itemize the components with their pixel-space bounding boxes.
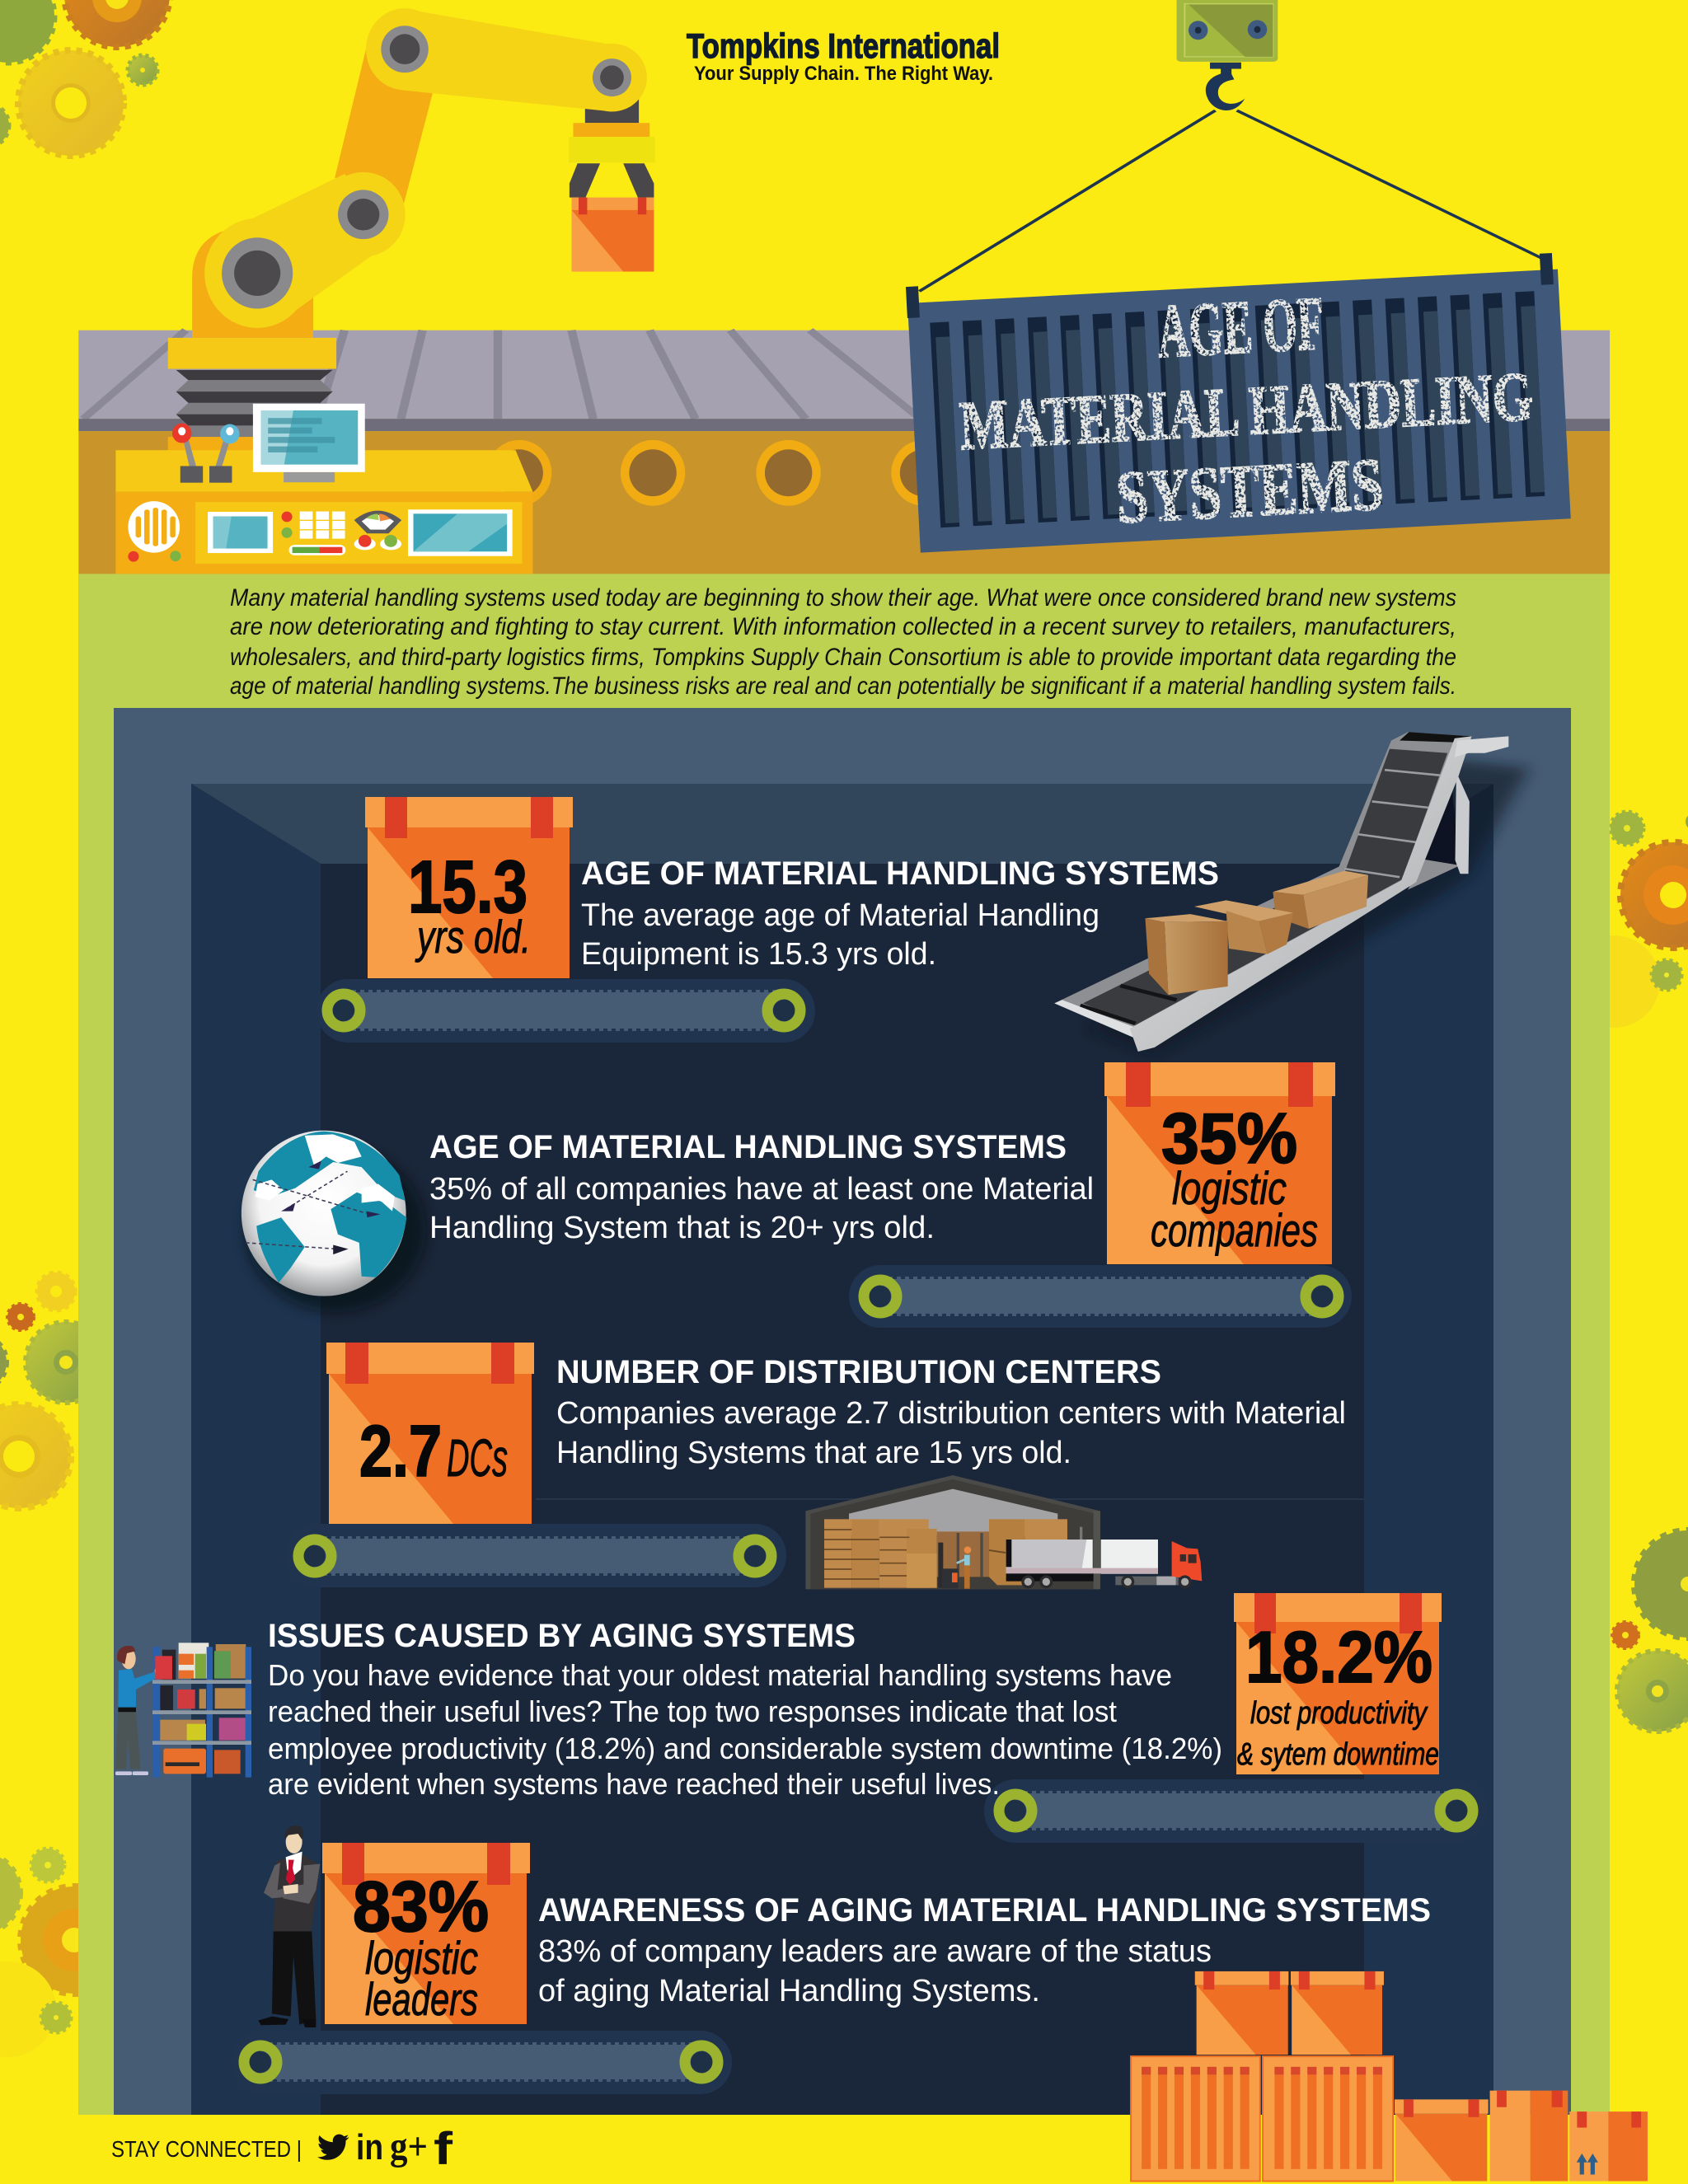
text 4: reached their useful lives? The top two responses indicate that lost [268, 1694, 1117, 1728]
footer: stay connected [111, 2122, 452, 2174]
gripper holding a box [569, 98, 655, 272]
intro paragraph [230, 584, 1456, 700]
box 3: 2.7 [359, 1410, 442, 1492]
intro paragraph: Many material handling systems used today are beginning to show their age. What were once considered brand new systems [230, 584, 1456, 612]
panel: warehouse interior [114, 708, 1571, 2115]
box 4 [1234, 1593, 1442, 1774]
text 5 [538, 1892, 1431, 2008]
icon: worker with shelves [115, 1643, 251, 1778]
text 3 [556, 1354, 1346, 1470]
logo: Your Supply Chain. The Right Way. [694, 63, 993, 85]
boxes at floor [1395, 2091, 1648, 2182]
text 3: Companies average 2.7 distribution centers with Material [556, 1396, 1346, 1431]
icon: facebook: f [434, 2122, 452, 2174]
belt 1 [316, 979, 815, 1043]
truck [1006, 1540, 1202, 1588]
text 1: Equipment is 15.3 yrs old. [581, 937, 936, 972]
gauge [354, 511, 401, 550]
text 5: AWARENESS OF AGING MATERIAL HANDLING SYSTEMS [538, 1892, 1431, 1929]
intro paragraph: wholesalers, and third-party logistics firms, Tompkins Supply Chain Consortium is able to provide important data regarding the [230, 644, 1456, 671]
box 3 [326, 1343, 534, 1524]
box 5: logistic [365, 1932, 478, 1984]
text 1: AGE OF MATERIAL HANDLING SYSTEMS [581, 855, 1219, 892]
box 4: 18.2% [1245, 1616, 1432, 1698]
control panel [115, 404, 532, 574]
footer: stay connected: STAY CONNECTED | [111, 2136, 302, 2162]
warehouse and truck illustration [805, 1475, 1202, 1589]
text 5: 83% of company leaders are aware of the status [538, 1934, 1212, 1969]
forklift worker [938, 1543, 971, 1589]
title: AGE OF [1156, 281, 1326, 373]
text 3: NUMBER OF DISTRIBUTION CENTERS [556, 1354, 1161, 1390]
item 2: systems over 20 years [241, 1062, 1352, 1328]
container corrugation [930, 291, 1545, 527]
text 4: ISSUES CAUSED BY AGING SYSTEMS [268, 1618, 856, 1654]
text 5: of aging Material Handling Systems. [538, 1974, 1040, 2008]
icon: businessman [258, 1825, 320, 2027]
worker [115, 1646, 172, 1775]
text 2: Handling System that is 20+ yrs old. [429, 1211, 935, 1245]
icon: twitter [317, 2135, 349, 2160]
intro paragraph: age of material handling systems.The business risks are real and can potentially be significant if a material handling system fails. [230, 673, 1456, 700]
box 3: DCs [447, 1428, 508, 1488]
screen left [208, 512, 273, 553]
text 4: are evident when systems have reached their useful lives. [268, 1767, 1000, 1801]
belt 2 [849, 1265, 1352, 1328]
screen right [408, 509, 513, 556]
arm base and bellows [168, 338, 336, 437]
box 5 [322, 1843, 530, 2025]
text 1: The average age of Material Handling [581, 898, 1100, 933]
text 4: employee productivity (18.2%) and considerable system downtime (18.2%) [268, 1732, 1222, 1765]
stacked boxes and containers [1131, 1971, 1648, 2182]
belt conveyor machine illustration [1054, 732, 1529, 1054]
keypad and lights [282, 512, 345, 555]
box 2 [1104, 1062, 1335, 1264]
box 2: 35% [1161, 1099, 1297, 1179]
monitor [253, 404, 365, 482]
title [958, 281, 1535, 539]
belt 3 [285, 1524, 786, 1587]
crane hoist and cables [919, 0, 1544, 291]
box 5: 83% [353, 1868, 489, 1947]
box 4: lost productivity [1250, 1696, 1428, 1731]
text 2: 35% of all companies have at least one Material [429, 1172, 1094, 1207]
icon: google plus: g+ [390, 2125, 428, 2168]
speaker [128, 501, 181, 562]
robot arm [168, 8, 655, 437]
intro paragraph: are now deteriorating and fighting to stay current. With information collected in a recent survey to retailers, manufacturers, [230, 613, 1456, 640]
icon: linkedin: in [356, 2127, 383, 2168]
box 1: 15.3 [408, 846, 528, 929]
item 4: issues caused by aging [115, 1593, 1487, 1843]
belt 4 [984, 1779, 1487, 1843]
item 5: awareness of aging systems [232, 1825, 1431, 2094]
levers [172, 424, 240, 483]
text 2 [429, 1129, 1094, 1245]
box 2: logistic [1172, 1162, 1287, 1214]
text 3: Handling Systems that are 15 yrs old. [556, 1436, 1071, 1470]
box stack top [1195, 1971, 1384, 2055]
cartons [1145, 871, 1368, 995]
orange containers [1131, 2056, 1393, 2182]
logo [687, 26, 1000, 85]
box 4: & sytem downtime [1237, 1737, 1439, 1772]
box 5: leaders [365, 1973, 478, 2025]
text 4 [268, 1618, 1222, 1801]
item 1: age of systems [316, 797, 1219, 1043]
text 1 [581, 855, 1219, 972]
box 1: yrs old. [415, 911, 531, 963]
rollers [487, 440, 956, 506]
gears: lower left [0, 1272, 128, 2057]
box 2: companies [1151, 1204, 1318, 1256]
title container [906, 253, 1571, 553]
factory conveyor band [78, 330, 1610, 574]
text 4: Do you have evidence that your oldest material handling systems have [268, 1658, 1172, 1692]
gears: right side [1568, 812, 1688, 1732]
title: SYSTEMS [1114, 443, 1386, 539]
box 1 [365, 797, 573, 978]
belt 5 [232, 2031, 732, 2094]
icon: globe [241, 1131, 425, 1312]
logo: Tompkins International [687, 26, 1000, 65]
gears: top left [0, 0, 170, 156]
green frame [78, 574, 1610, 2115]
text 2: AGE OF MATERIAL HANDLING SYSTEMS [429, 1129, 1067, 1165]
item 3: distribution centers [285, 1343, 1346, 1589]
